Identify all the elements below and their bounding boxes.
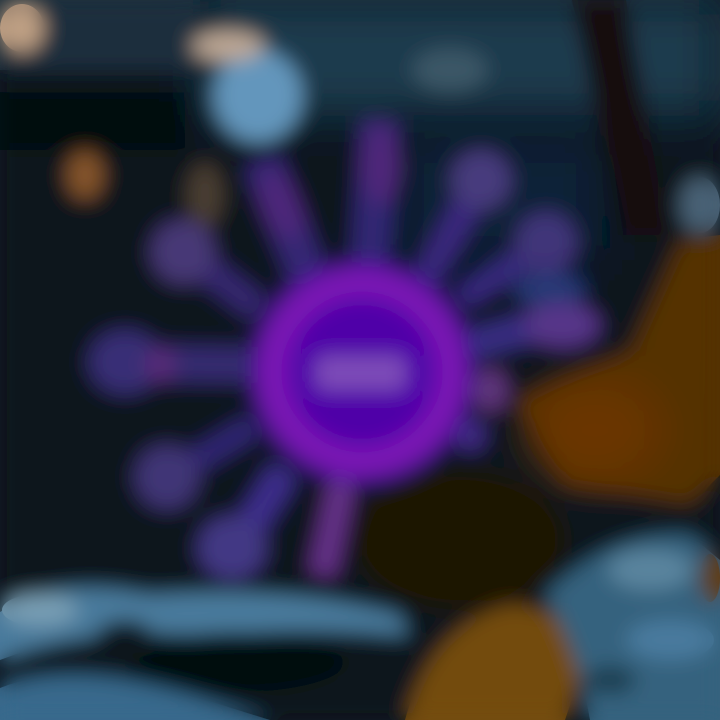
spoke: upper left bbox=[251, 160, 312, 285]
light: peach highlight bbox=[192, 31, 264, 61]
hub glow bbox=[250, 260, 474, 484]
dark brown mound bbox=[355, 470, 565, 610]
dark vertical post bbox=[572, 0, 668, 235]
spoke: right bbox=[470, 272, 600, 347]
orange wedge core bbox=[525, 378, 665, 482]
orange wedge right bbox=[515, 235, 720, 505]
spoke: lower left long bbox=[198, 470, 285, 580]
spoke: bottom bbox=[322, 470, 345, 575]
node: lower right small bbox=[472, 368, 508, 412]
spoke: lower left bbox=[135, 425, 255, 509]
clouds: bottom right bbox=[545, 535, 720, 720]
hub centre disc bbox=[288, 298, 436, 446]
light: bright moon blob bbox=[214, 50, 302, 142]
hub label bar bbox=[316, 356, 406, 390]
spoke: left upper bbox=[151, 220, 260, 310]
hub ring bbox=[274, 284, 450, 460]
spoke: left bbox=[89, 330, 250, 394]
light: brown bokeh bbox=[187, 163, 223, 227]
gold mound bottom bbox=[405, 605, 585, 720]
spoke: right upper bbox=[460, 212, 577, 300]
clouds: bottom left bbox=[0, 588, 408, 660]
light: orange bokeh bbox=[67, 151, 103, 199]
spoke: top bbox=[363, 120, 399, 290]
top right haze bbox=[680, 177, 720, 233]
spoke: upper right bbox=[425, 150, 511, 280]
light: top left bokeh bbox=[0, 4, 44, 52]
diagram: radial hub with spokes bbox=[89, 120, 600, 580]
node: lower right faint bbox=[454, 419, 486, 451]
